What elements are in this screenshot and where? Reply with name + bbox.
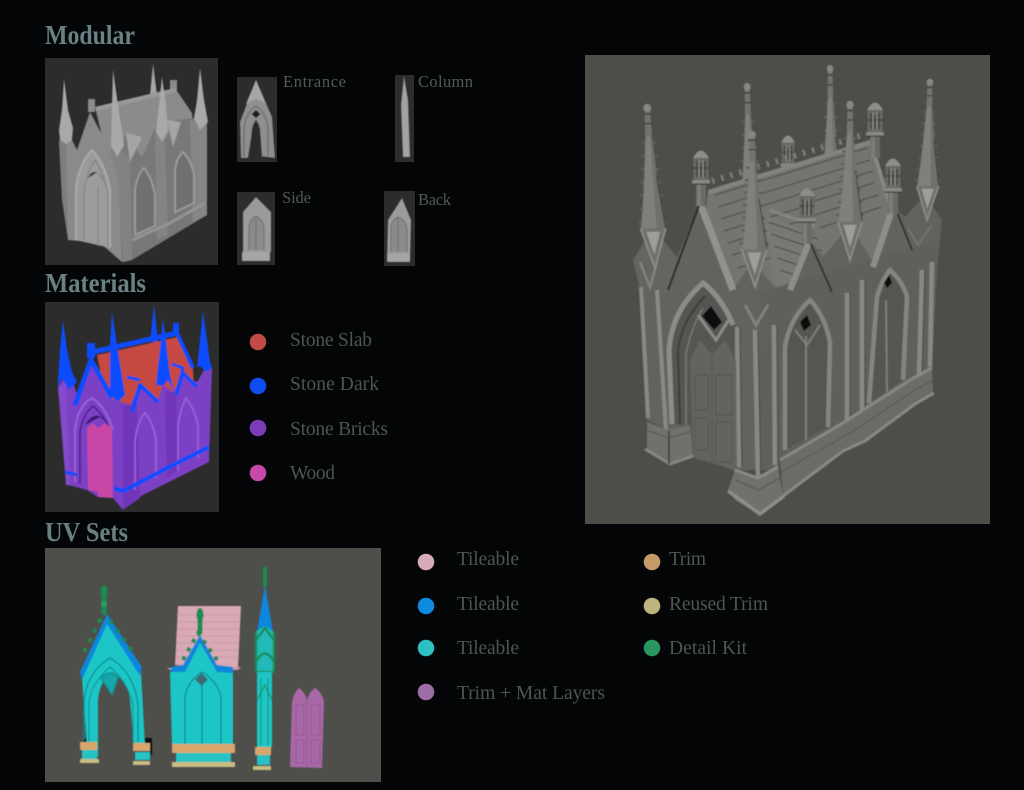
module: column UV xyxy=(253,567,274,770)
legend item: Tileable pink xyxy=(418,549,519,570)
legend item: Detail Kit: Detail Kit xyxy=(669,638,748,659)
legend item: Stone Bricks: Stone Bricks xyxy=(290,419,388,440)
heading: Modular: Modular xyxy=(45,20,135,50)
legend item: Trim: Trim xyxy=(669,549,706,570)
thumbnail: Column xyxy=(395,75,414,162)
module: entrance UV xyxy=(80,585,152,765)
legend item: Wood xyxy=(250,463,335,484)
legend item: Stone Dark: Stone Dark xyxy=(290,374,379,395)
legend item: Stone Slab xyxy=(250,330,372,351)
legend: UV sets, second column xyxy=(644,549,768,659)
panel: modular assembled building xyxy=(45,58,218,265)
module: door UV xyxy=(290,688,324,768)
label: Entrance: Entrance xyxy=(283,72,346,91)
side windows xyxy=(785,270,907,450)
panel: UV sets modules xyxy=(45,548,381,782)
thumbnail: Entrance xyxy=(237,77,277,162)
back spires xyxy=(735,65,844,247)
legend item: Trim + Mat Layers: Trim + Mat Layers xyxy=(457,683,605,704)
label: Back: Back xyxy=(418,190,452,209)
legend item: Tileable blue xyxy=(418,594,519,615)
legend: materials xyxy=(250,330,388,484)
legend item: Stone Slab: Stone Slab xyxy=(290,330,372,351)
legend item: Wood: Wood xyxy=(290,463,335,484)
legend item: Tileable pink: Tileable xyxy=(457,549,519,570)
thumbnail: Side xyxy=(237,192,275,265)
module: side UV xyxy=(167,606,241,767)
legend item: Tileable teal xyxy=(418,638,519,659)
roof xyxy=(700,134,900,310)
legend item: Tileable blue: Tileable xyxy=(457,594,519,615)
wall body xyxy=(633,195,942,478)
panel: material ID building xyxy=(45,302,219,512)
heading: UV Sets: UV Sets xyxy=(45,517,128,547)
heading: Materials: Materials xyxy=(45,268,146,298)
legend: UV sets, first column xyxy=(418,549,605,704)
thumbnail: Back xyxy=(384,191,415,266)
front spires and pinnacles xyxy=(633,79,942,287)
legend item: Stone Dark xyxy=(250,374,379,395)
legend item: Reused Trim: Reused Trim xyxy=(669,594,768,615)
legend item: Tileable teal: Tileable xyxy=(457,638,519,659)
base plinth xyxy=(645,368,934,515)
panel: final render of the mausoleum xyxy=(585,55,990,524)
entrance arch and door xyxy=(669,283,737,472)
label: Side: Side xyxy=(282,188,311,207)
label: Column: Column xyxy=(418,72,473,91)
